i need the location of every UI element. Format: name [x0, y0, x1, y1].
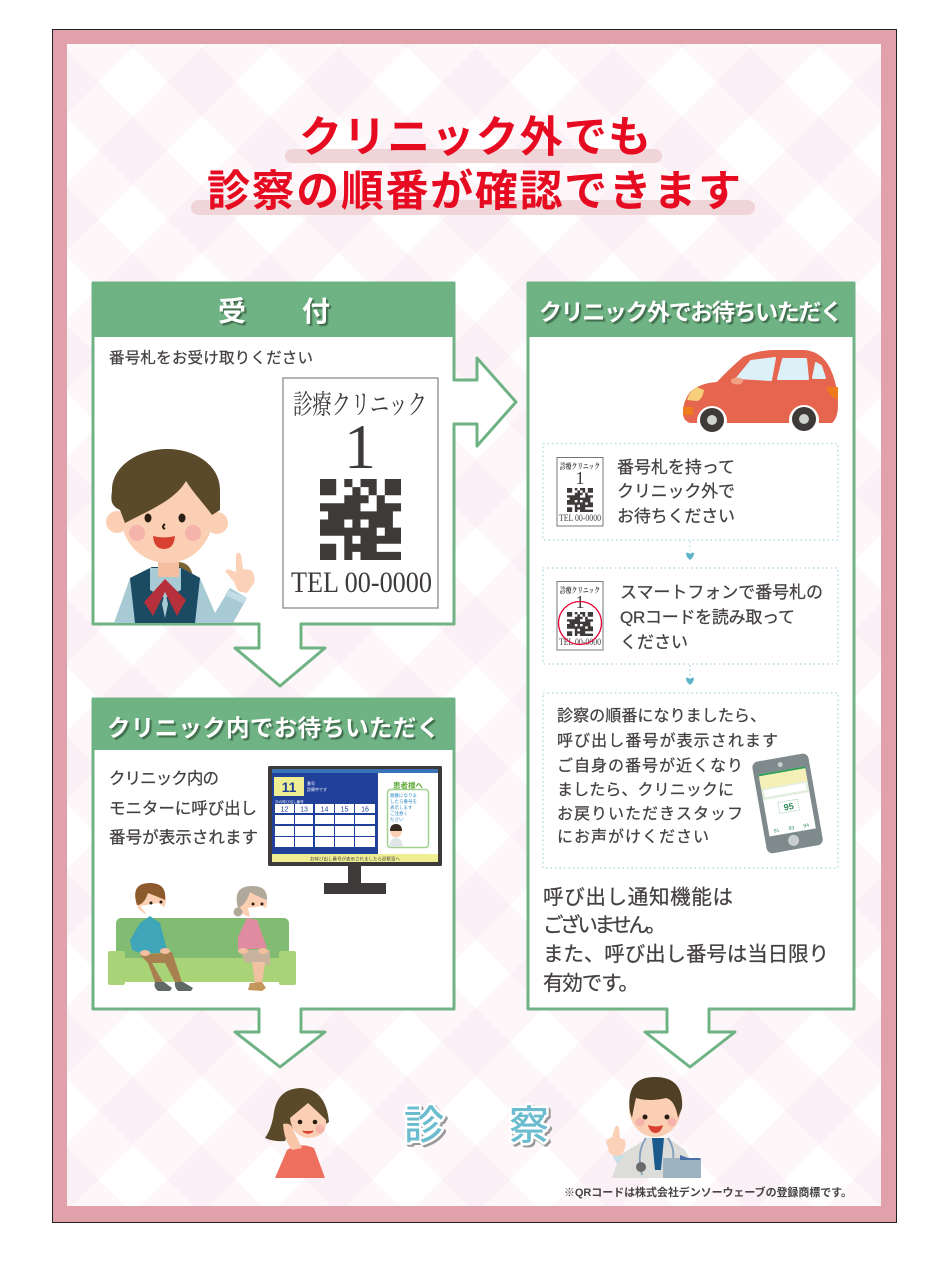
step 3 text: 呼び出し番号が表示されます — [557, 732, 778, 750]
icon: smartphone: 93 — [788, 825, 795, 832]
step 1 text: お待ちください — [617, 507, 735, 526]
monitor description: 番号が表示されます — [109, 828, 258, 847]
icon: waiting room monitor: 15 — [341, 806, 348, 814]
small ticket: 診療クリニック — [560, 461, 600, 471]
connector 1 — [686, 541, 694, 560]
icon: waiting room monitor: 16 — [361, 806, 369, 814]
step 3 text: ましたら、クリニックに — [557, 781, 734, 799]
step 3 text: にお声がけください — [557, 828, 709, 846]
title — [191, 114, 755, 216]
icon: waiting room monitor: 11 — [282, 779, 297, 795]
icon: waiting room monitor: 診察中です — [307, 786, 327, 792]
number ticket: 1 — [344, 411, 376, 482]
icon: waiting room monitor: したら番号を — [390, 798, 417, 805]
icon: waiting room monitor: 14 — [321, 806, 328, 814]
step 3 text — [557, 707, 778, 846]
step 3 text: 診察の順番になりましたら、 — [557, 707, 766, 725]
icon: waiting room monitor: 13 — [300, 806, 308, 814]
panel outline with arrow — [93, 699, 454, 1067]
icon: waiting room monitor: 順番になりま — [390, 792, 417, 799]
icon: smartphone: 95 — [783, 801, 794, 813]
small ticket — [557, 458, 603, 526]
small ticket with QR highlighted: TEL 00-0000 — [559, 637, 601, 647]
panel: waiting inside the clinic — [92, 698, 455, 1067]
small ticket: 1 — [576, 468, 584, 488]
panel outline with arrow — [528, 283, 854, 1067]
heading: examination: 診 — [404, 1104, 444, 1148]
icon: waiting room monitor: 番号 — [307, 780, 315, 786]
notice text: また、呼び出し番号は当日限り — [543, 943, 829, 966]
header: inside clinic: クリニック内でお待ちいただく — [107, 715, 440, 741]
step 2 box — [543, 568, 838, 664]
header: outside clinic — [527, 282, 855, 337]
panel: reception — [92, 282, 516, 686]
connector 2 — [686, 665, 694, 685]
small ticket with QR highlighted — [557, 582, 603, 650]
icon: doctor — [606, 1077, 701, 1178]
icon: waiting room monitor: お呼び出し番号が表示されましたら診察室へ — [310, 856, 400, 862]
title: 診察の順番が確認できます — [207, 168, 741, 216]
title: クリニック外でも — [299, 114, 651, 162]
header: outside clinic: クリニック外でお待ちいただく — [539, 299, 843, 325]
step 3 text: ご自身の番号が近くなり — [557, 757, 743, 775]
icon: waiting room monitor: 12 — [281, 806, 288, 814]
icon: waiting room monitor: ご注意く — [390, 810, 408, 817]
icon: waiting room monitor: 患者様へ — [393, 780, 423, 790]
step 3 text: お戻りいただきスタッフ — [557, 805, 743, 823]
monitor description: モニターに呼び出し — [109, 799, 257, 818]
monitor description: クリニック内の — [109, 769, 219, 788]
icon: smartphone: 91 — [773, 828, 780, 835]
small ticket: TEL 00-0000 — [559, 513, 601, 523]
notice text: 有効です。 — [543, 972, 639, 995]
number ticket — [283, 378, 438, 608]
header: inside clinic — [92, 698, 455, 750]
monitor description — [109, 769, 258, 847]
panel: waiting outside the clinic — [527, 282, 855, 1067]
step 1 text: 番号札を持って — [617, 458, 735, 477]
header: reception: 受 — [218, 296, 246, 327]
step 2 text: QRコードを読み取って — [620, 608, 795, 627]
icon: waiting room monitor: 次の呼び出し番号 — [275, 799, 304, 804]
icon: waiting room monitor: ださい — [390, 816, 404, 823]
notice text: ございません。 — [543, 913, 666, 937]
icon: patient — [265, 1088, 329, 1178]
icon: waiting room monitor: 表示します — [390, 804, 413, 811]
heading: examination: 察 — [509, 1104, 549, 1148]
step 1 text — [617, 458, 735, 526]
header: reception: 付 — [302, 296, 330, 327]
icon: car — [683, 350, 838, 436]
step 2 text: スマートフォンで番号札の — [620, 583, 823, 602]
step 2 text — [620, 583, 823, 652]
panel outline with arrows — [93, 283, 516, 686]
header: reception — [92, 282, 455, 337]
notice text: 呼び出し通知機能は — [543, 886, 733, 909]
icon: patients on sofa — [108, 883, 296, 991]
footnote: ※QRコードは株式会社デンソーウェーブの登録商標です。 — [564, 1185, 852, 1199]
small ticket with QR highlighted: 診療クリニック — [560, 585, 600, 595]
number ticket: TEL 00-0000 — [291, 566, 432, 599]
step 1 box — [543, 444, 838, 540]
icon: receptionist — [106, 449, 255, 623]
instruction text: 番号札をお受け取りください — [109, 349, 313, 367]
icon: smartphone — [751, 753, 824, 854]
small ticket with QR highlighted: 1 — [576, 592, 584, 612]
heading: examination — [404, 1104, 549, 1148]
step 1 text: クリニック外で — [617, 482, 735, 501]
notice text — [543, 886, 829, 995]
number ticket: 診療クリニック — [293, 390, 427, 420]
icon: waiting room monitor — [268, 766, 442, 894]
icon: smartphone: 94 — [803, 823, 810, 829]
step 2 text: ください — [620, 633, 688, 652]
step 3 box — [543, 693, 838, 868]
